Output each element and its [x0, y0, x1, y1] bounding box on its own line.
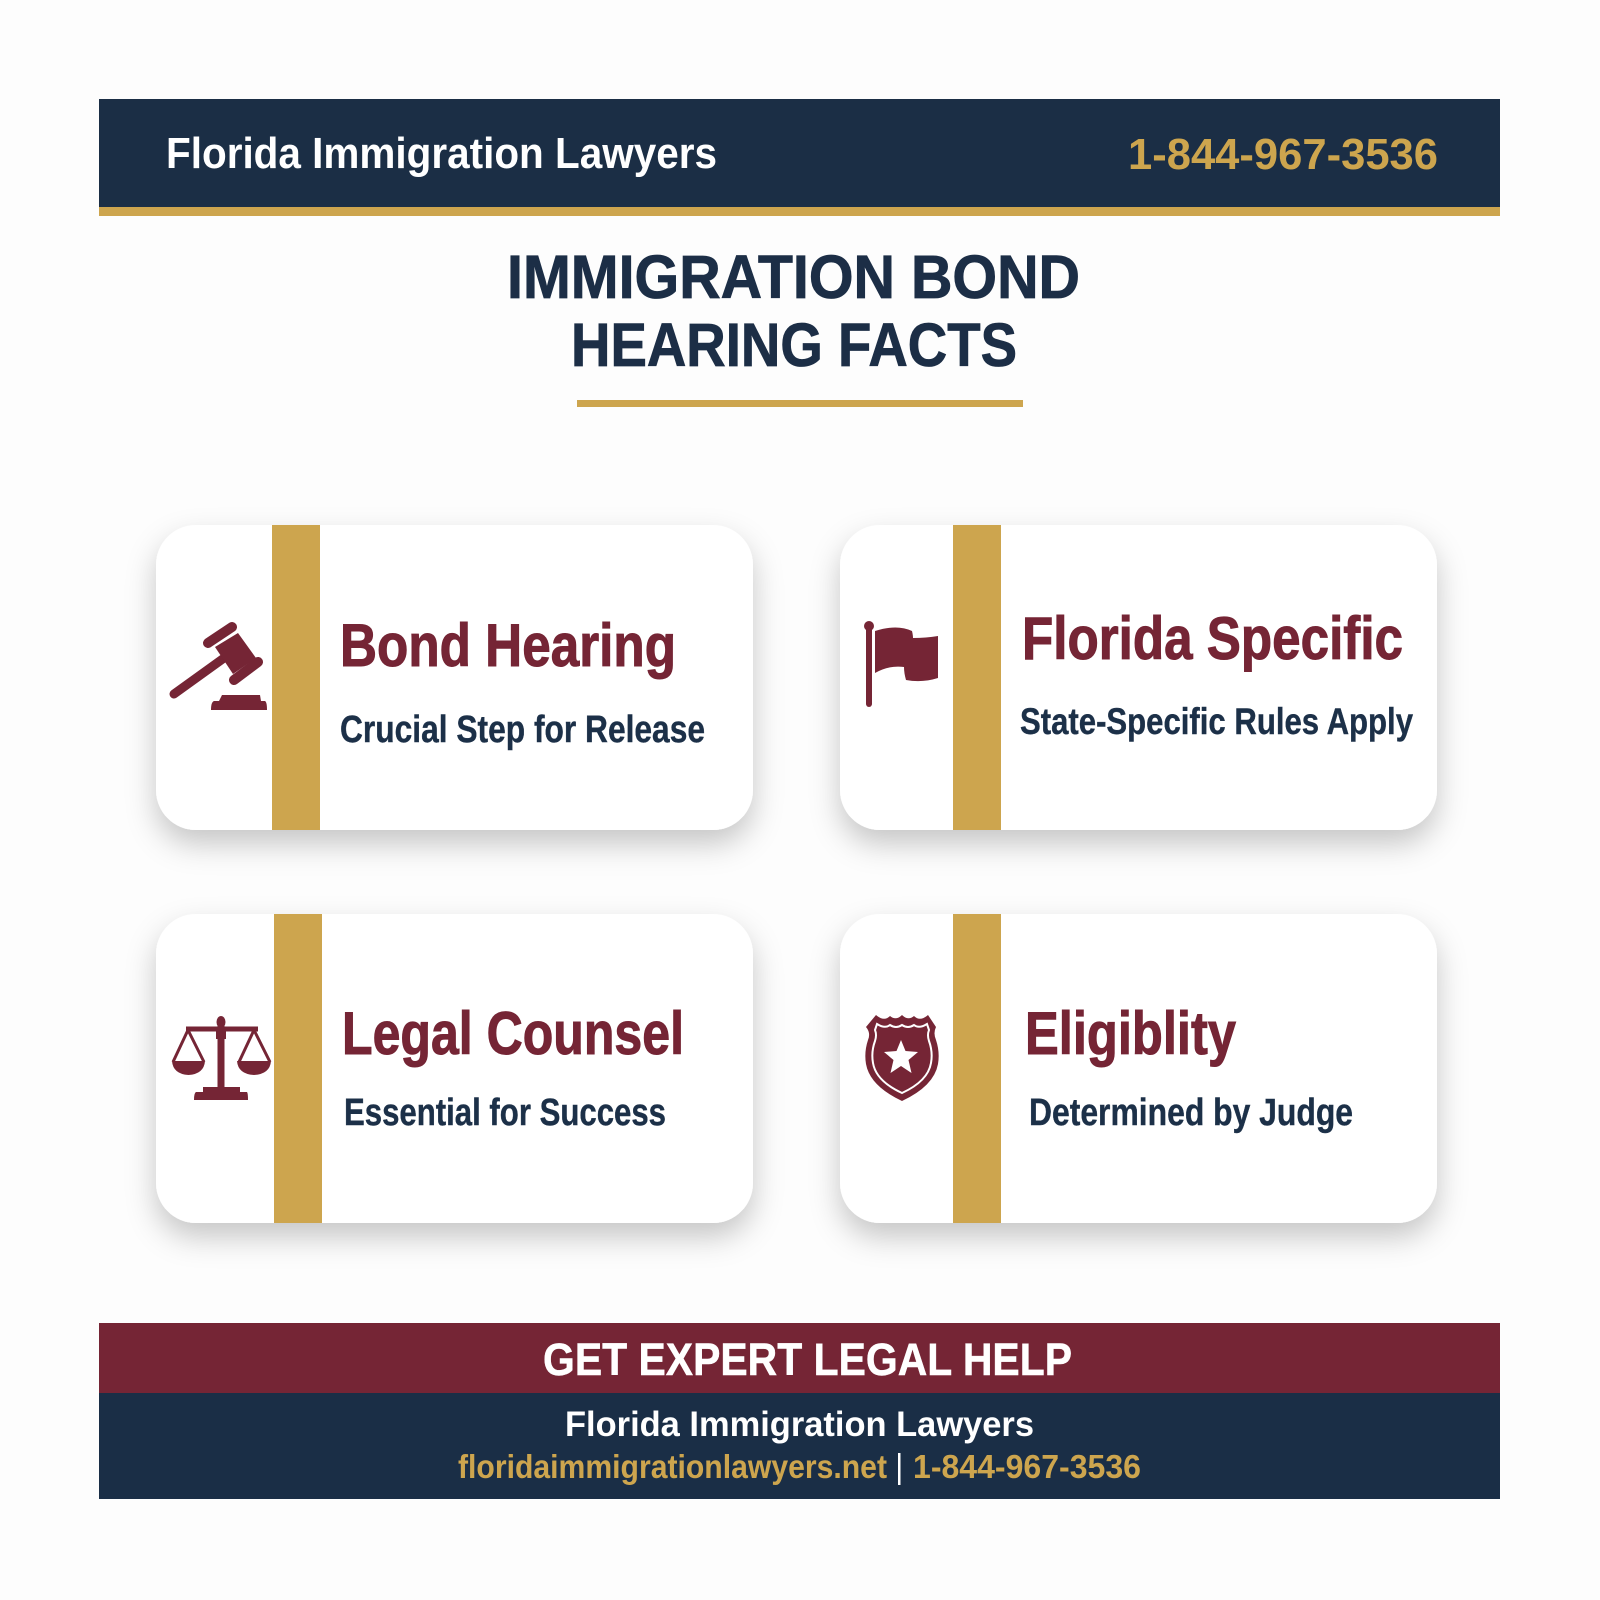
text: determined by judge: Determined by Judge	[1029, 1092, 1353, 1134]
footer heading: GET EXPERT LEGAL HELP	[543, 1334, 1072, 1385]
icon: flag	[864, 621, 938, 707]
footer contact block	[99, 1393, 1500, 1499]
title	[507, 243, 1080, 379]
icon: shield badge	[865, 1015, 939, 1101]
title: HEARING FACTS	[571, 311, 1017, 379]
panel: bond hearing	[156, 525, 753, 830]
icon: scales of justice	[172, 1016, 271, 1100]
panel: legal counsel	[156, 914, 753, 1223]
heading: florida specific: Florida Specific	[1022, 605, 1403, 672]
heading: eligiblity: Eligiblity	[1025, 1000, 1237, 1067]
text: state-specific rules: State-Specific Rules Apply	[1020, 701, 1413, 742]
icon: gavel	[174, 627, 267, 710]
footer phone number: 1-844-967-3536	[913, 1448, 1141, 1485]
title underline	[577, 400, 1023, 407]
text: crucial step: Crucial Step for Release	[340, 709, 705, 751]
title: IMMIGRATION BOND	[507, 243, 1080, 311]
heading: bond hearing: Bond Hearing	[340, 612, 676, 679]
heading: legal counsel: Legal Counsel	[342, 1000, 684, 1067]
text: essential for success: Essential for Success	[344, 1092, 666, 1134]
panel: eligibility	[840, 914, 1437, 1223]
header bar	[99, 99, 1500, 216]
footer call to action banner	[99, 1323, 1500, 1393]
header phone number: 1-844-967-3536	[1128, 130, 1438, 179]
panel: florida specific	[840, 525, 1437, 830]
footer website: floridaimmigrationlawyers.net	[458, 1448, 887, 1485]
footer firm name: Florida Immigration Lawyers	[565, 1405, 1034, 1444]
header firm name: Florida Immigration Lawyers	[166, 129, 717, 178]
